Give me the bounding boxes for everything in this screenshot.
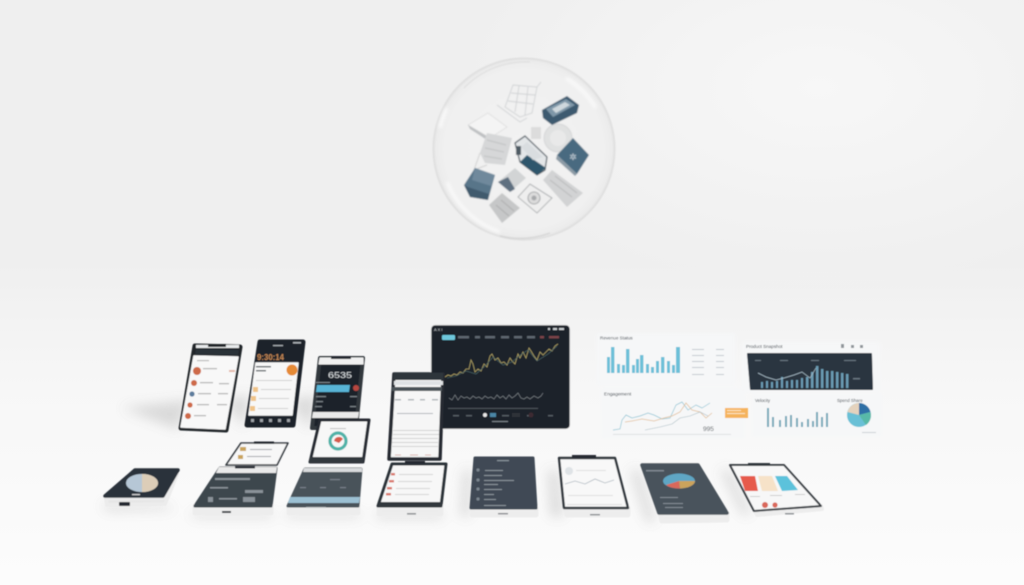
phone: tilted dark with pie	[642, 465, 727, 521]
icon: grey box lower right	[543, 170, 583, 207]
panel: engagement line chart card	[601, 388, 745, 439]
bar chart: product	[761, 366, 848, 388]
icon: white box	[468, 113, 507, 142]
phone: clock and tasks	[247, 342, 303, 425]
icon: dark blue cube top right	[542, 96, 579, 125]
panel: revenue bar chart card	[597, 333, 735, 385]
line chart: price	[445, 344, 558, 377]
icon: small mid block	[498, 168, 526, 192]
panel: velocity and spend share card: Spend Share	[837, 398, 863, 403]
icon: slate diamond right: ✲	[569, 152, 577, 162]
panel: product snapshot card	[742, 342, 880, 392]
icon: sketch square	[518, 184, 552, 213]
bar chart: velocity	[767, 408, 828, 427]
panel: tablet with stock chart: A X I	[434, 327, 442, 332]
phone: flat dark menu	[471, 458, 536, 515]
phone: article with tabs	[389, 373, 443, 459]
phone: flat red list	[378, 461, 446, 515]
panel: engagement line chart card: 995	[703, 426, 714, 433]
sphere with floating cubes	[433, 58, 615, 240]
phone: flat list behind row	[226, 442, 288, 465]
panel: velocity and spend share card: Velocity	[755, 398, 771, 403]
icon: dark blue cube centre	[515, 136, 547, 175]
device: flat dark tile with pie	[105, 470, 178, 506]
callout: orange tag	[725, 408, 748, 418]
icon: small pale box	[531, 127, 541, 139]
phone: tilted white with tiles	[730, 463, 822, 515]
icon: pale round dial	[544, 124, 572, 152]
phone: flat dark stats	[288, 468, 362, 513]
icon: grey circuit block left	[474, 133, 512, 170]
phone: expenses list	[181, 344, 240, 430]
icon: wireframe cart	[497, 82, 541, 122]
phone: balance: 6535	[328, 370, 352, 380]
phone: balance	[312, 356, 363, 428]
icon: slate cube left	[464, 168, 495, 200]
panel: product snapshot card: Product Snapshot	[746, 344, 783, 349]
pie chart: spend share	[847, 403, 871, 427]
panel: engagement line chart card: Engagement	[604, 392, 632, 398]
panel: revenue bar chart card: Revenue Status	[600, 336, 633, 340]
phone: flat white line chart	[559, 455, 628, 515]
bar chart: revenue	[607, 347, 680, 373]
panel: tablet with stock chart	[431, 325, 570, 429]
phone: flat dark dashboard	[195, 466, 277, 513]
phone: clock and tasks: 9:30:14	[257, 353, 285, 362]
shadows under the devices	[103, 395, 752, 522]
panel: velocity and spend share card	[752, 393, 882, 437]
icon: grey block bottom	[489, 193, 520, 223]
icon: slate diamond right	[556, 138, 589, 176]
phone: donut progress	[309, 418, 369, 463]
line chart: volume	[449, 393, 543, 400]
